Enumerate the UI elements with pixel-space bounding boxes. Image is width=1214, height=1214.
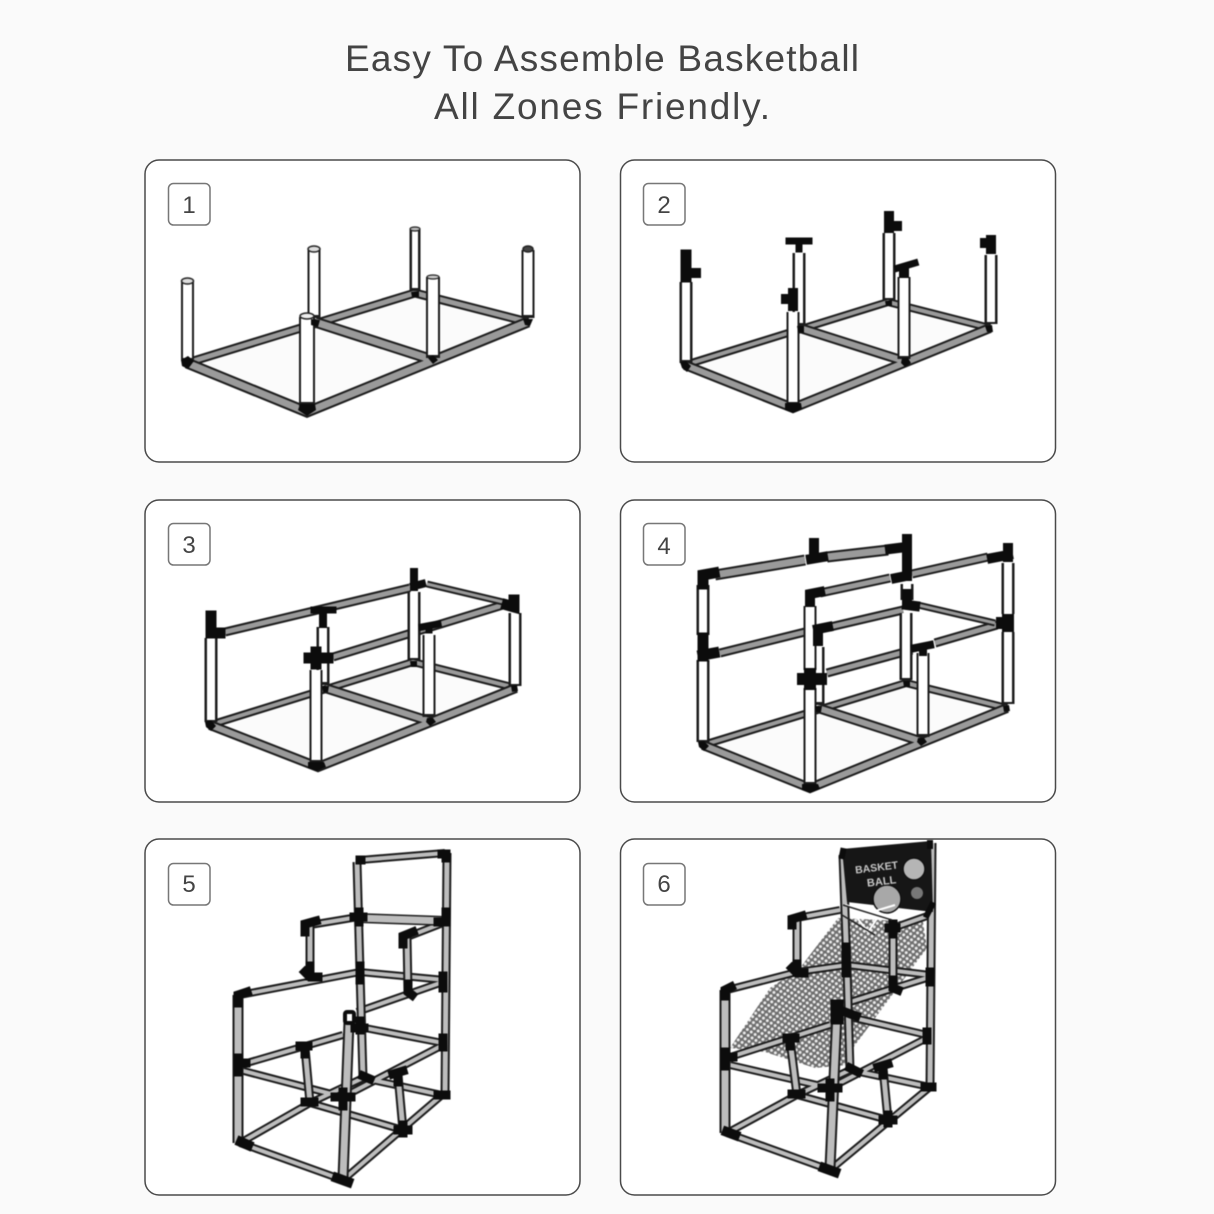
- step number 5: [168, 864, 210, 905]
- title: All Zones Friendly.: [434, 86, 770, 127]
- step number 2: [644, 184, 685, 225]
- net mesh: [730, 918, 927, 1068]
- backboard: BALL: [866, 874, 897, 890]
- connectors: [725, 916, 932, 1123]
- title: [345, 38, 859, 127]
- step number 3: [168, 524, 210, 565]
- step number 6: 6: [657, 871, 671, 898]
- step number 4: [644, 524, 685, 565]
- panel: step 4: [620, 500, 1056, 802]
- step number 4: 4: [657, 533, 671, 560]
- diagram: full frame with raised top section: [238, 853, 447, 1182]
- frame pipes: [725, 843, 932, 1170]
- diagram: base frame with six upright posts: [181, 227, 533, 416]
- backboard: BASKET: [854, 859, 899, 877]
- step number 3: 3: [182, 532, 196, 559]
- backboard: [842, 841, 933, 913]
- panel: step 2: [620, 160, 1056, 462]
- step number 1: [168, 184, 210, 225]
- step number 2: 2: [657, 192, 671, 219]
- diagram: posts fitted with black connectors: [680, 216, 993, 413]
- diagram: upper rails added to form a box: [205, 572, 518, 771]
- panel: step 6: [620, 839, 1056, 1195]
- hoop: [845, 905, 895, 932]
- title: Easy To Assemble Basketball: [345, 38, 859, 79]
- diagram: second tier of rails and uprights: [698, 539, 1010, 793]
- step number 6: [644, 864, 685, 905]
- step number 1: 1: [182, 192, 196, 219]
- panel: step 1: [145, 160, 580, 462]
- step number 5: 5: [182, 871, 196, 898]
- diagram: finished hoop with net and backboard: [725, 841, 933, 1172]
- panel: step 3: [145, 500, 580, 802]
- panel: step 5: [145, 839, 580, 1195]
